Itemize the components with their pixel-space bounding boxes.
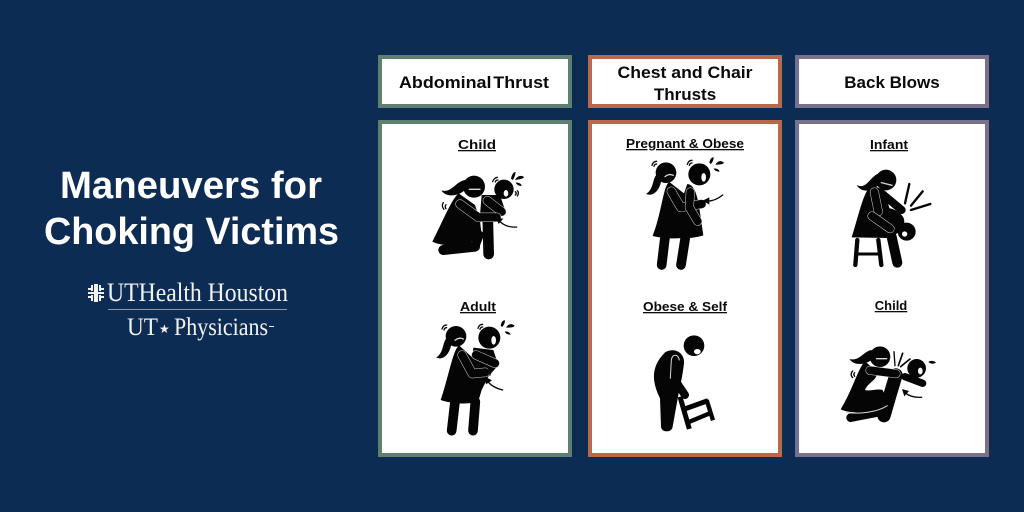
heading: Chest and Chair Thrusts <box>618 63 753 104</box>
logo: UTHealth Houston and UT Physicians <box>88 278 288 341</box>
icon: back blows on child <box>841 346 936 418</box>
label: Child (back blows): Child <box>875 298 907 313</box>
icon: chest thrust on pregnant or obese person <box>646 157 724 265</box>
panel: chest and chair thrusts <box>588 120 782 457</box>
logo: UTHealth Houston and UT Physicians: Physicians <box>174 314 268 341</box>
icon: back blows on infant <box>852 170 930 265</box>
panel: abdominal thrust heading box <box>378 55 572 108</box>
panel: back blows <box>795 120 989 457</box>
heading: Chest and Chair Thrusts: Thrusts <box>654 85 716 104</box>
heading: Chest and Chair Thrusts: Chest and Chair <box>618 63 753 82</box>
heading: Back Blows: Back Blows <box>844 73 940 92</box>
label: Adult: Adult <box>460 299 497 314</box>
logo: UTHealth Houston and UT Physicians: UTHealth Houston <box>107 278 288 307</box>
panel: back blows heading box <box>795 55 989 108</box>
title: Choking Victims <box>44 211 339 253</box>
icon: abdominal thrust on child <box>432 172 524 254</box>
label: Infant: Infant <box>870 137 909 152</box>
logo: UTHealth Houston and UT Physicians: UT <box>127 314 158 341</box>
heading: Abdominal Thrust: Abdominal Thrust <box>399 73 549 92</box>
label: Obese & Self: Obese & Self <box>643 299 728 314</box>
label: Child (abdominal): Child <box>458 137 496 152</box>
label: Pregnant & Obese: Pregnant & Obese <box>626 136 744 151</box>
logo: UTHealth Houston and UT Physicians: ★ <box>159 322 170 336</box>
icon: abdominal thrust on adult <box>436 320 515 431</box>
panel: abdominal thrust <box>378 120 572 457</box>
title <box>44 165 339 253</box>
title: Maneuvers for <box>60 165 322 207</box>
icon: self thrust over chair <box>654 335 713 431</box>
panel: chest and chair thrusts heading box <box>588 55 782 108</box>
